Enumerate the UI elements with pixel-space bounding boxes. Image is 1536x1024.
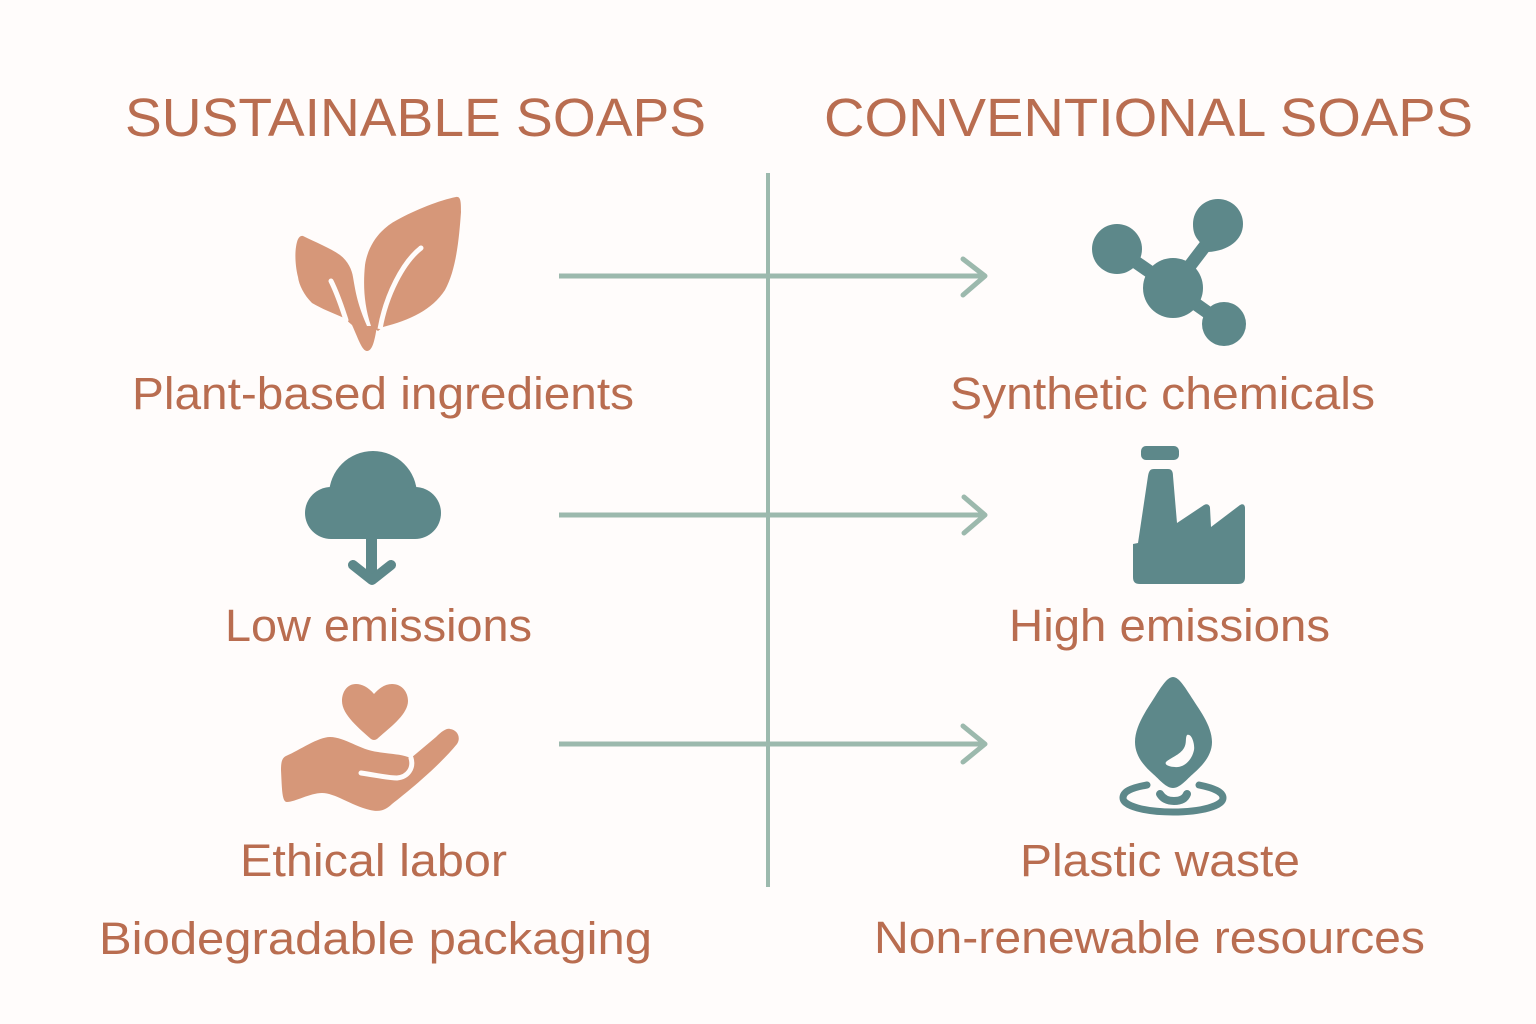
arrow: plant-based to synthetic [559,259,985,295]
arrow: ethical labor to plastic waste [559,726,985,762]
label: plant-based ingredients: Plant-based ingredients [132,368,634,419]
icon: hand holding heart [281,684,459,811]
central divider [766,173,770,887]
panel: sustainable soaps [99,88,706,964]
icon: leaf sprout [295,197,461,351]
label: low emissions: Low emissions [225,600,532,651]
label: non-renewable resources: Non-renewable resources [874,912,1425,963]
panel: conventional soaps [824,88,1473,963]
heading: sustainable soaps: SUSTAINABLE SOAPS [125,88,706,148]
icon: cloud with down arrow [305,451,441,580]
label: ethical labor: Ethical labor [240,835,507,886]
arrow: low to high emissions [559,497,985,533]
icon: chemical molecule [1092,199,1246,346]
icon: water drop with ripple [1123,677,1223,812]
label: biodegradable packaging: Biodegradable packaging [99,913,652,964]
heading: conventional soaps: CONVENTIONAL SOAPS [824,88,1473,148]
label: synthetic chemicals: Synthetic chemicals [950,368,1375,419]
label: plastic waste: Plastic waste [1020,835,1300,886]
label: high emissions: High emissions [1009,600,1330,651]
icon: factory [1133,446,1245,584]
